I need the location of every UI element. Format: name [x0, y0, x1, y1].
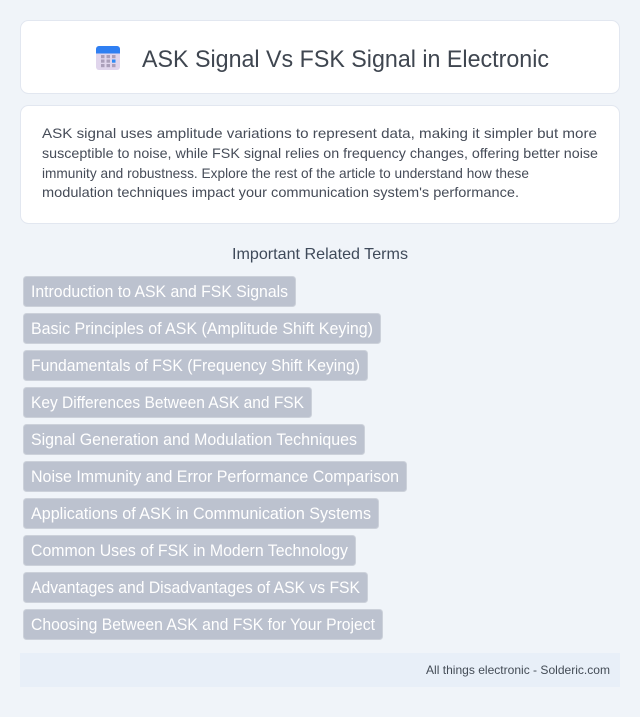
- tag 2: [24, 314, 380, 344]
- intro paragraph: immunity and robustness. Explore the rest of the article to understand how these: [42, 165, 529, 181]
- tag 1: [24, 276, 296, 306]
- tag 10: Choosing Between ASK and FSK for Your Project: [31, 616, 375, 634]
- tag 8: [24, 536, 356, 566]
- heading: related terms: Important Related Terms: [232, 246, 408, 263]
- tag 7: [24, 498, 378, 528]
- tag 8: Common Uses of FSK in Modern Technology: [31, 542, 349, 560]
- panel: intro text: [20, 106, 620, 224]
- tag 3: [24, 350, 368, 380]
- intro paragraph: susceptible to noise, while FSK signal relies on frequency changes, offering better noise: [42, 145, 598, 161]
- tag 2: Basic Principles of ASK (Amplitude Shift Keying): [31, 320, 373, 338]
- tag 3: Fundamentals of FSK (Frequency Shift Keying): [31, 357, 360, 375]
- tag 4: Key Differences Between ASK and FSK: [31, 394, 304, 412]
- footer credit: All things electronic - Solderic.com: [426, 663, 610, 677]
- tag 7: Applications of ASK in Communication Systems: [31, 505, 371, 523]
- icon: calendar: [96, 46, 120, 70]
- tag 6: [24, 462, 406, 492]
- intro paragraph: [42, 125, 598, 200]
- panel: header: [20, 20, 620, 94]
- tag 1: Introduction to ASK and FSK Signals: [31, 283, 288, 301]
- title: ASK Signal Vs FSK Signal in Electronic: [142, 46, 549, 73]
- intro paragraph: modulation techniques impact your communication system's performance.: [42, 184, 519, 200]
- tag list: [24, 276, 406, 640]
- tag 5: Signal Generation and Modulation Techniques: [31, 431, 357, 449]
- tag 5: [24, 424, 364, 454]
- footer: [20, 653, 620, 687]
- tag 9: Advantages and Disadvantages of ASK vs FSK: [31, 579, 360, 597]
- tag 6: Noise Immunity and Error Performance Comparison: [31, 468, 399, 486]
- tag 9: [24, 572, 368, 602]
- intro paragraph: ASK signal uses amplitude variations to represent data, making it simpler but more: [42, 125, 597, 141]
- tag 10: [24, 610, 382, 640]
- tag 4: [24, 388, 312, 418]
